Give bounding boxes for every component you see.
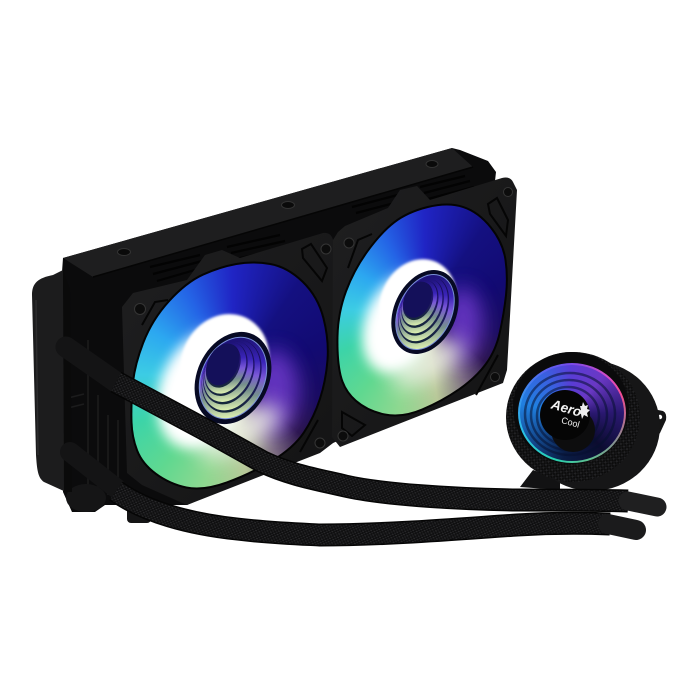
lower tube left connector: [70, 452, 116, 488]
fan 1 corner details: [134, 244, 331, 452]
fan 1 blade rim: [132, 264, 327, 488]
end tank: [32, 270, 72, 492]
pump foot: [520, 470, 560, 490]
radiator slats: [60, 340, 118, 495]
pump cap top: [540, 390, 590, 440]
pump mounting ear hole: [658, 415, 662, 419]
logo: [546, 396, 585, 430]
fan 2 frame: [332, 178, 517, 447]
upper tube ferrule: [628, 501, 657, 507]
illustration: liquid cooler: [32, 148, 666, 546]
screw: radiator left: [118, 248, 130, 256]
fan 2 corner details: [338, 188, 512, 441]
logo: Aero: Aero: [549, 396, 583, 420]
fan 2 lit blades: [338, 206, 506, 414]
screw: radiator centre: [282, 202, 294, 208]
fan 2: [330, 178, 517, 447]
bottom tab: [127, 502, 151, 523]
upper tube left connector: [66, 347, 116, 382]
fan 1 infinity hub: [180, 319, 286, 437]
lower tube ferrule: [608, 524, 636, 530]
pump cap shadow: [551, 408, 595, 452]
end cap cylinder: [66, 484, 106, 512]
logo leaf mark: [578, 402, 590, 419]
fan 1 frame: [122, 233, 337, 505]
fan 1 lit blades: [132, 264, 327, 488]
fan 2 infinity hub: [378, 259, 472, 365]
pump carbon body: [506, 352, 640, 482]
logo: Cool: Cool: [560, 415, 581, 430]
pump inner mirror: [520, 365, 624, 461]
fan 1: [120, 233, 340, 505]
radiator fins: [150, 176, 474, 281]
pump inner spiral bands: [525, 373, 615, 455]
pump mounting ear: [640, 405, 666, 450]
pump base: [524, 361, 660, 491]
radiator body: [60, 148, 496, 523]
upper tube: [116, 382, 628, 501]
fan 2 blade rim: [338, 206, 506, 415]
tubes: [66, 347, 657, 535]
pump unit: [506, 352, 666, 491]
lower tube: [116, 491, 610, 535]
pump rgb ring: [518, 363, 626, 463]
screw: radiator right: [426, 160, 438, 168]
pump face bezel: [513, 352, 629, 464]
